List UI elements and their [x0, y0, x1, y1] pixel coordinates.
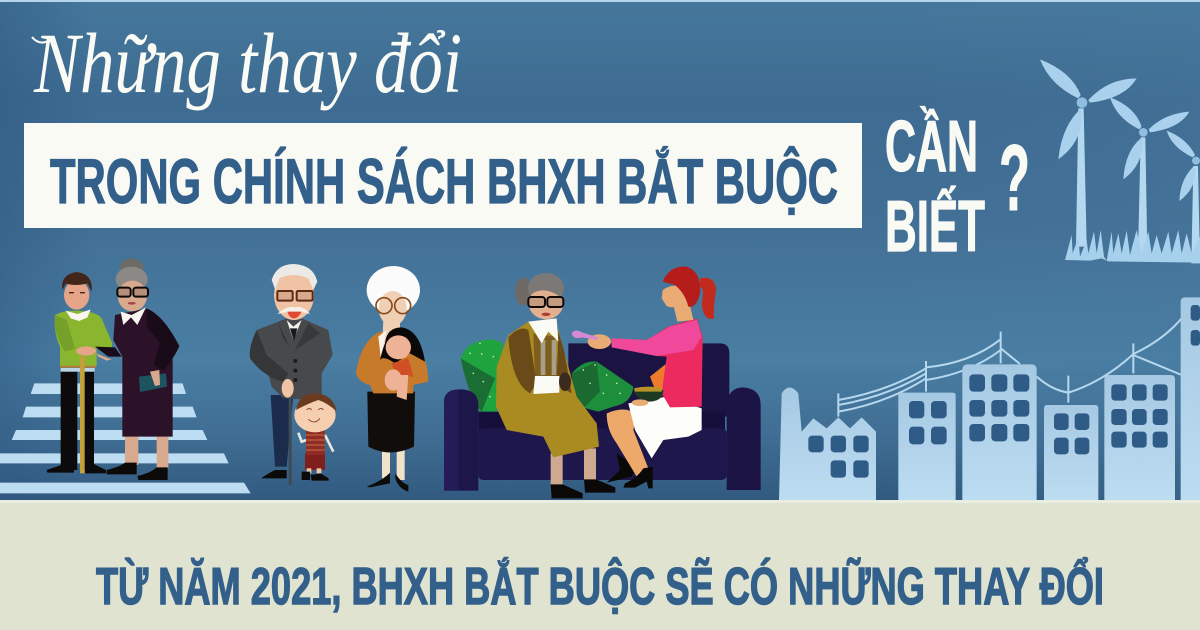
figure: little boy: [294, 393, 337, 481]
buildings: [898, 297, 1200, 500]
figure: old lady on sofa: [496, 273, 615, 498]
heading: cần biết: [885, 106, 1030, 267]
figure: young man helping: [47, 272, 112, 473]
script title: Những thay đổi: [33, 15, 462, 111]
background panel: [0, 0, 1200, 500]
crosswalk stripes: [0, 383, 251, 493]
heading: cần biết: BIẾT: [885, 186, 985, 267]
heading: cần biết: ?: [999, 125, 1030, 230]
figure: sofa with pillows: [444, 339, 761, 491]
icon: wind turbines: [1040, 59, 1200, 263]
figure: old lady with bag: [95, 259, 179, 480]
illustration: city skyline: [779, 297, 1200, 500]
figure: young woman feeding: [572, 267, 716, 488]
figure: grandmother with child: [356, 266, 428, 492]
heading: cần biết: CẦN: [885, 106, 978, 187]
figure: old man with cane: [250, 264, 333, 485]
title box: [24, 123, 862, 228]
grass: [1065, 230, 1200, 263]
bottom panel: [0, 500, 1200, 630]
power lines: [838, 318, 1182, 417]
factory: [779, 387, 876, 500]
